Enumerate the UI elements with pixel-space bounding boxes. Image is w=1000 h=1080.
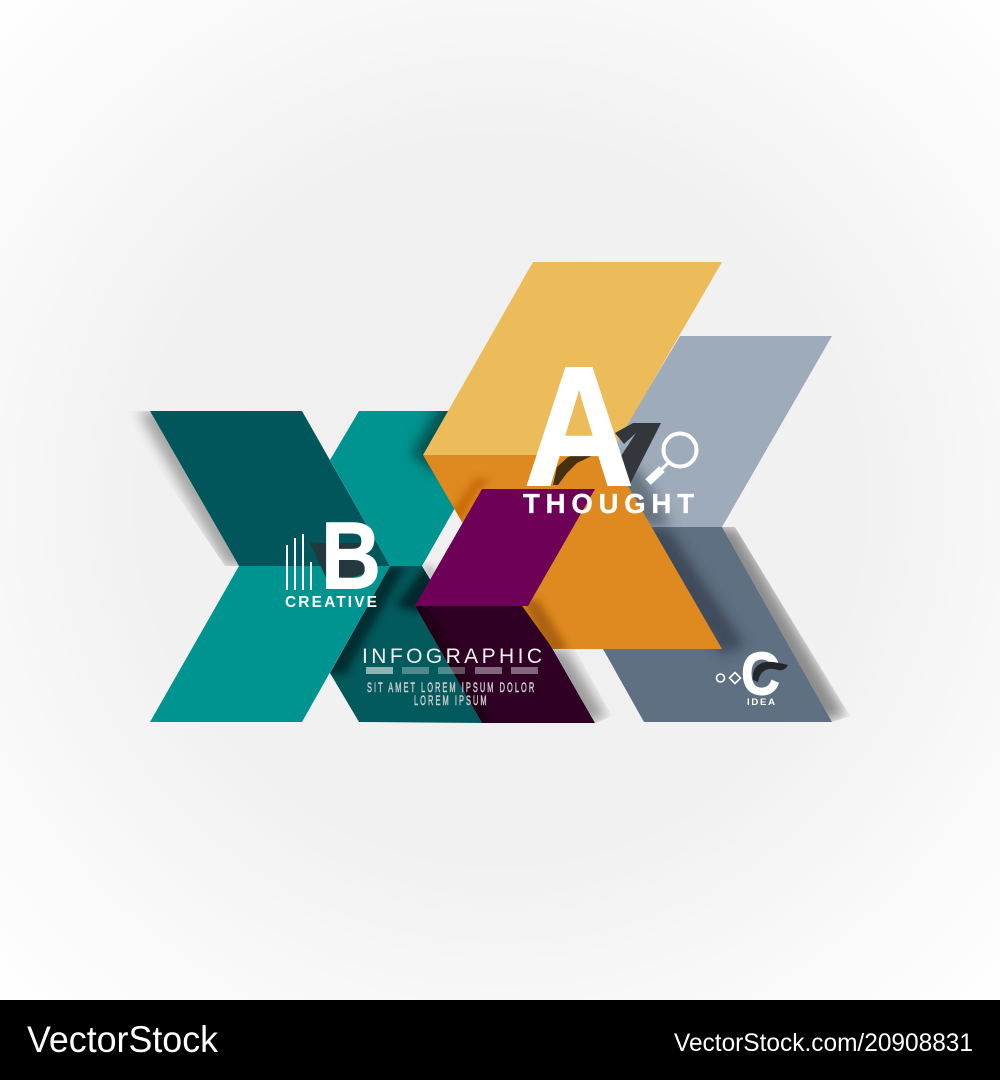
label: IDEA: IDEA — [747, 697, 775, 708]
letter C block — [716, 640, 788, 708]
icon: circle and diamond — [716, 672, 740, 684]
panel: teal top parallelogram — [330, 411, 510, 566]
panel: blue-grey parallelogram — [600, 336, 832, 527]
yellow shadow on teal — [407, 411, 448, 478]
body text — [367, 681, 534, 709]
footer bar — [0, 1000, 1000, 1080]
panel: purple parallelogram — [415, 489, 595, 606]
label: THOUGHT: THOUGHT — [523, 488, 694, 519]
panel: dark teal top parallelogram — [150, 411, 390, 566]
letter A shadow on grey — [615, 423, 661, 484]
panel: teal lower parallelogram — [150, 566, 390, 722]
infographic title block — [362, 645, 542, 709]
letter A shadow on yellow and orange — [553, 447, 600, 485]
panel: dark teal lower chevron — [330, 566, 482, 723]
soft shadows on background — [138, 411, 846, 723]
brand: VectorStock: VectorStock — [27, 1019, 218, 1060]
panel: slate chevron — [603, 527, 832, 722]
icon: magnifier — [648, 434, 696, 482]
heading: A: A — [524, 332, 634, 522]
purple edge shadow on orange — [450, 478, 568, 655]
teal edge shadow on dark purple — [412, 606, 490, 723]
panel: yellow parallelogram — [423, 262, 722, 455]
letter A block — [523, 332, 696, 522]
heading: C: C — [741, 640, 780, 708]
icon: vertical bars — [287, 534, 311, 590]
heading: B: B — [321, 502, 381, 610]
letter B block — [285, 502, 381, 611]
heading: INFOGRAPHIC: INFOGRAPHIC — [362, 645, 542, 668]
body text: SIT AMET LOREM IPSUM DOLOR — [367, 681, 534, 696]
panel: dark purple lower parallelogram — [415, 606, 595, 723]
letter C shadow — [753, 662, 788, 682]
letter B shadow — [310, 543, 371, 582]
label: CREATIVE: CREATIVE — [285, 594, 377, 611]
divider bars — [366, 667, 538, 674]
inner shadows on dark teal lower chevron — [330, 566, 430, 679]
body text: LOREM IPSUM — [414, 694, 487, 709]
orange shadow on grey panels — [605, 455, 745, 655]
panel: orange chevron — [423, 455, 722, 649]
image id: VectorStock.com/20908831 — [674, 1029, 973, 1057]
